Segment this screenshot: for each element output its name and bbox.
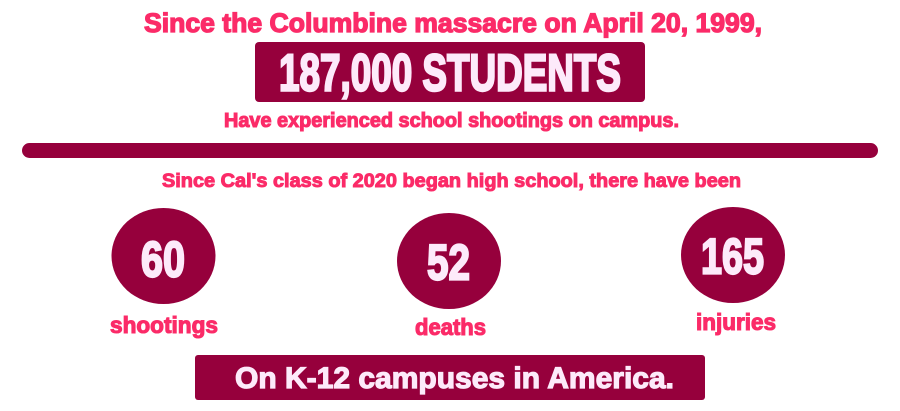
banner: on K-12 campuses: On K-12 campuses in America. — [235, 362, 674, 395]
banner: 187,000 students: 187,000 STUDENTS — [279, 44, 621, 102]
stat: 52 deaths: 52 — [427, 234, 470, 290]
stat: 165 injuries: 165 — [701, 228, 764, 284]
stat: 52 deaths — [397, 213, 501, 340]
stat: 165 injuries — [681, 207, 785, 335]
text: class of 2020 intro: Since Cal's class of 2020 began high school, there have been — [162, 170, 741, 192]
stat: 60 shootings — [110, 208, 218, 338]
banner: 187,000 students — [255, 42, 645, 102]
stat: 60 shootings: 60 — [141, 232, 185, 288]
banner: on K-12 campuses — [195, 355, 705, 400]
divider bar — [22, 143, 878, 158]
stat: 52 deaths: deaths — [415, 314, 486, 340]
heading: since Columbine: Since the Columbine massacre on April 20, 1999, — [144, 8, 762, 38]
subheading: experienced shootings: Have experienced school shootings on campus. — [224, 109, 679, 132]
stat: 165 injuries: injuries — [696, 309, 776, 335]
stat: 60 shootings: shootings — [110, 312, 218, 338]
